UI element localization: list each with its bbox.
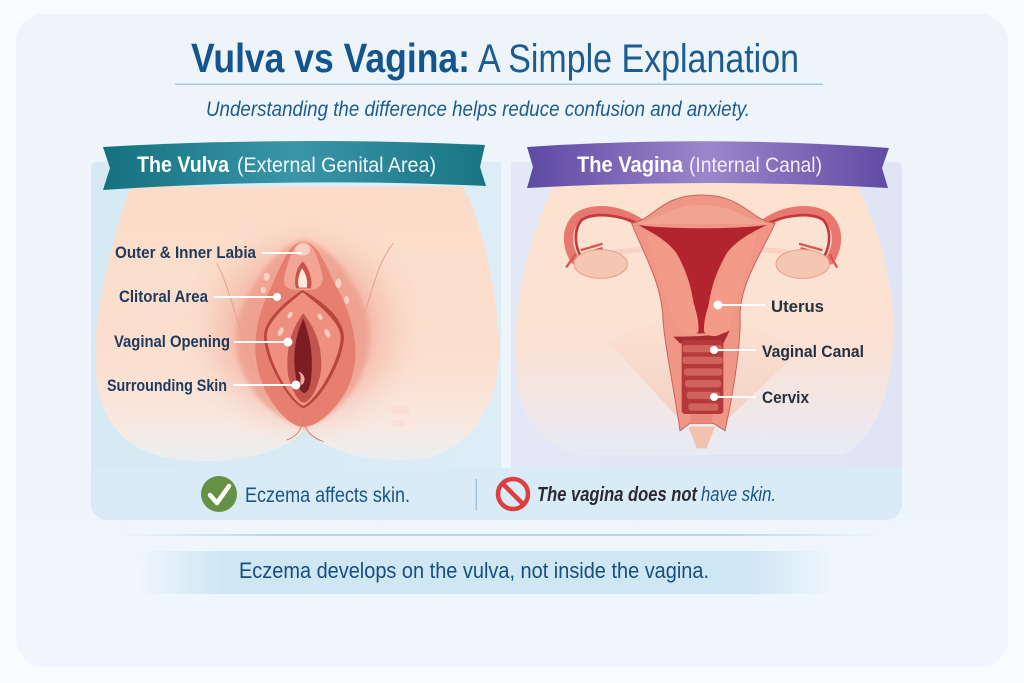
labels: vagina: Uterus bbox=[771, 297, 824, 316]
labels: vagina bbox=[710, 297, 864, 407]
text: the vagina does not have skin: The vagina does not bbox=[537, 483, 698, 506]
ovaries bbox=[574, 247, 829, 278]
fallopian tubes bbox=[567, 211, 837, 268]
banner: vagina: (Internal Canal) bbox=[689, 154, 822, 177]
banner: vulva bbox=[103, 141, 486, 190]
illustration: internal anatomy bbox=[515, 183, 893, 455]
vaginal canal ribs bbox=[682, 340, 723, 423]
uterine cavity bbox=[638, 225, 767, 333]
title: A Simple Explanation bbox=[478, 37, 799, 81]
labels: vulva: Vaginal Opening bbox=[114, 333, 230, 351]
illustration: external anatomy bbox=[95, 187, 499, 461]
conclusion banner bbox=[140, 551, 830, 594]
icon: prohibited sign bbox=[498, 479, 528, 509]
labels: vagina: Vaginal Canal bbox=[762, 342, 864, 361]
text: the vagina does not have skin: have skin. bbox=[701, 483, 776, 506]
panel: vagina bbox=[511, 162, 902, 468]
text: eczema affects skin: Eczema affects skin. bbox=[245, 484, 410, 507]
banner: vulva: The Vulva bbox=[137, 152, 230, 177]
key facts strip bbox=[91, 468, 902, 520]
labels: vulva: Surrounding Skin bbox=[107, 377, 227, 395]
labels: vulva: Outer & Inner Labia bbox=[115, 244, 257, 262]
banner: vulva: (External Genital Area) bbox=[237, 154, 436, 177]
banner: vagina bbox=[527, 141, 889, 188]
icon: check mark bbox=[201, 476, 237, 512]
title: Vulva vs Vagina: bbox=[191, 35, 470, 81]
labels: vulva bbox=[107, 244, 302, 395]
uterine walls bbox=[647, 235, 699, 335]
labels: vagina: Cervix bbox=[762, 388, 809, 407]
title bbox=[191, 35, 799, 81]
subtitle: Understanding the difference helps reduce confusion and anxiety. bbox=[206, 97, 750, 121]
uterus and canal outer bbox=[632, 195, 775, 431]
banner: vagina: The Vagina bbox=[577, 152, 684, 177]
conclusion banner: Eczema develops on the vulva, not inside the vagina. bbox=[239, 558, 709, 583]
labels: vulva: Clitoral Area bbox=[119, 288, 209, 306]
panel: vulva bbox=[91, 162, 501, 468]
